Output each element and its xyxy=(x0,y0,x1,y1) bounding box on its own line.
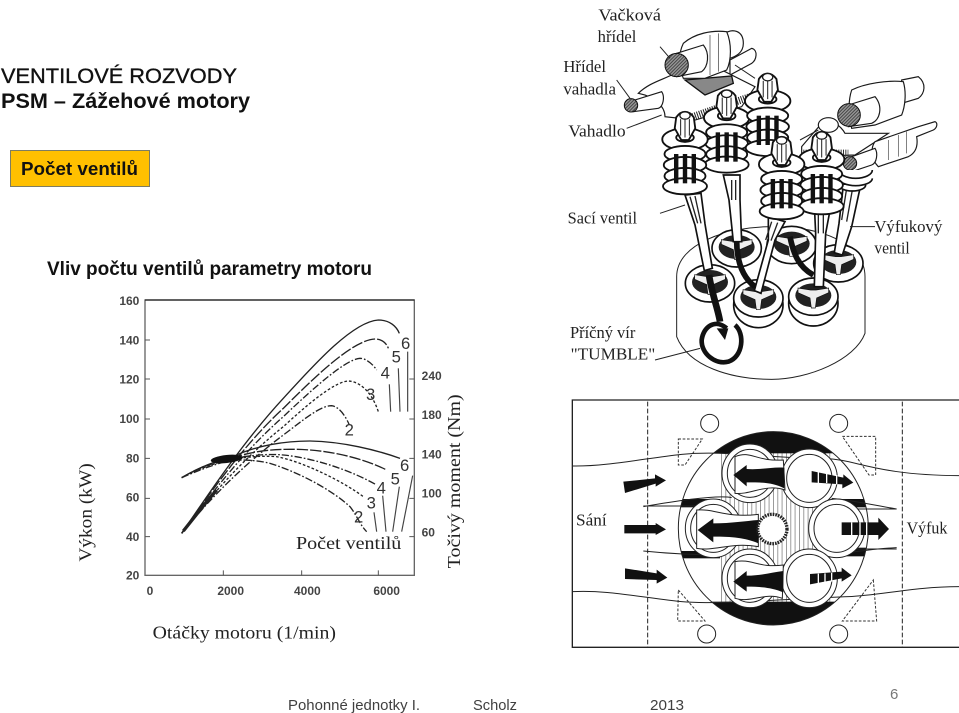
callout: Počet ventilů xyxy=(10,150,150,186)
dashed cooling passages xyxy=(678,436,877,621)
line chart: power and torque: 140 xyxy=(422,447,442,461)
leader lines xyxy=(374,352,413,532)
power curves xyxy=(182,320,399,533)
front valves xyxy=(662,112,872,293)
inlet arrows xyxy=(623,474,667,584)
camshaft left xyxy=(624,31,756,120)
axis tick labels: 60 xyxy=(126,491,140,505)
curve numbers: 2 xyxy=(354,507,363,526)
line chart: power and torque: 0 xyxy=(147,584,154,598)
axis tick labels: 120 xyxy=(119,372,140,386)
right rocker shaft xyxy=(843,122,937,172)
curve numbers xyxy=(345,334,410,526)
curve numbers: 5 xyxy=(392,347,401,366)
cylinder head top view diagram: Výfuk xyxy=(907,519,948,538)
line chart: power and torque: Otáčky motoru (1/min) xyxy=(153,622,336,643)
engine valve train illustration xyxy=(563,6,943,379)
footer xyxy=(288,697,684,713)
combustion chamber xyxy=(678,428,872,628)
intake flow shapes xyxy=(697,455,785,600)
title: VENTILOVÉ ROZVODY xyxy=(1,65,237,88)
port outlines xyxy=(572,453,959,603)
title xyxy=(1,65,250,113)
part labels: Výfukový xyxy=(874,217,943,236)
title: PSM – Zážehové motory xyxy=(1,90,250,113)
part labels: vahadla xyxy=(563,79,617,98)
line chart: power and torque: 100 xyxy=(422,487,442,501)
callout: Počet ventilů: Počet ventilů xyxy=(21,158,138,179)
cylinder head top view diagram xyxy=(572,400,959,647)
line chart: power and torque: Točivý moment (Nm) xyxy=(444,394,465,568)
axis titles: Výkon (kW) xyxy=(75,463,96,562)
part labels xyxy=(563,6,943,363)
curve numbers: 6 xyxy=(400,456,409,475)
flow labels: Sání xyxy=(576,510,607,529)
curve numbers: 6 xyxy=(401,334,410,353)
part labels: Příčný vír xyxy=(570,323,636,342)
valve heads xyxy=(685,226,863,328)
part labels: Vahadlo xyxy=(568,122,626,141)
axis tick labels: 40 xyxy=(126,530,140,544)
axis tick labels: 20 xyxy=(126,569,140,583)
line chart: power and torque: 2000 xyxy=(217,584,244,598)
flow arrows xyxy=(702,237,813,362)
curve numbers: 2 xyxy=(345,421,354,440)
axis tick labels: 160 xyxy=(119,294,140,308)
frame xyxy=(572,400,959,647)
torque curves xyxy=(182,441,400,532)
axis tick labels xyxy=(119,294,140,583)
subheading: Vliv počtu ventilů parametry motoru xyxy=(47,259,372,280)
curve numbers: 4 xyxy=(381,363,390,382)
spark plug xyxy=(758,514,787,544)
part labels: Vačková xyxy=(598,6,662,25)
line chart: power and torque: 4000 xyxy=(294,584,321,598)
part labels: hřídel xyxy=(598,27,637,46)
valves xyxy=(685,444,865,608)
rear valves xyxy=(704,73,790,242)
camshaft right xyxy=(802,77,924,157)
part labels: Hřídel xyxy=(563,57,606,76)
line chart: power and torque: Počet ventilů xyxy=(296,533,401,553)
axis tick labels: 80 xyxy=(126,451,140,465)
axis tick labels: 100 xyxy=(119,412,140,426)
bolt holes xyxy=(698,414,848,643)
part labels: "TUMBLE" xyxy=(571,344,655,363)
curve numbers: 4 xyxy=(377,479,386,498)
part labels: Sací ventil xyxy=(568,209,637,228)
intake arrows xyxy=(698,465,784,592)
line chart: power and torque: 240 xyxy=(422,369,442,383)
line chart: power and torque: 60 xyxy=(422,525,435,539)
curve numbers: 5 xyxy=(391,469,400,488)
curve numbers: 3 xyxy=(367,493,376,512)
curve numbers: 3 xyxy=(366,385,375,404)
line chart: power and torque: 180 xyxy=(422,408,442,422)
exhaust arrows xyxy=(810,471,889,584)
axis tick labels: 140 xyxy=(119,333,140,347)
leader lines xyxy=(617,47,875,360)
part labels: ventil xyxy=(874,239,910,258)
line chart: power and torque: 6000 xyxy=(373,584,400,598)
page number: 6 xyxy=(890,686,898,703)
line chart: power and torque xyxy=(75,294,465,643)
cylinder xyxy=(677,227,865,379)
